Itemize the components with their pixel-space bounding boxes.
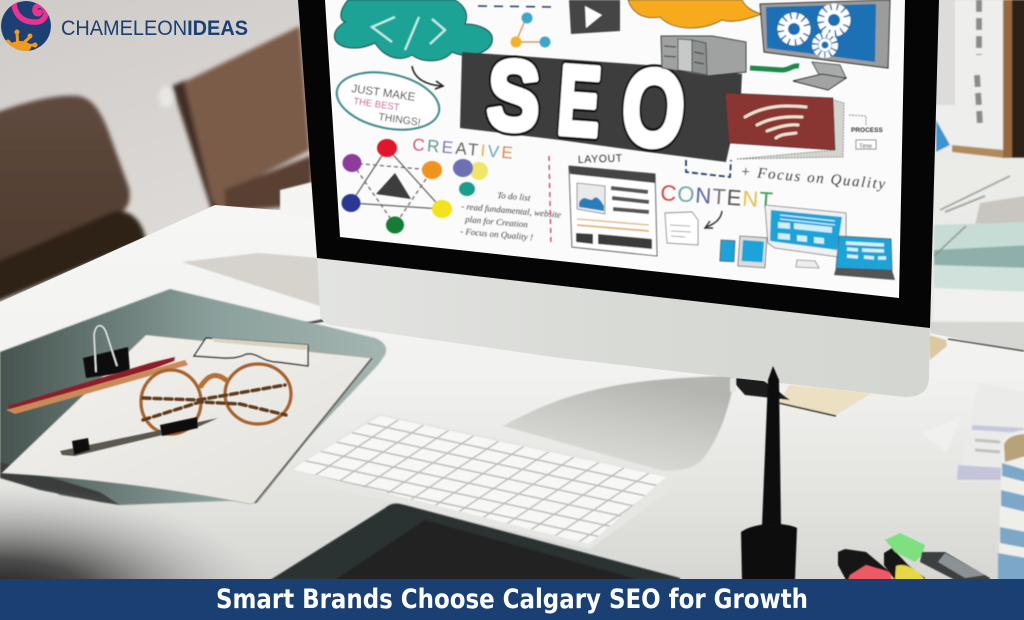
desk pen stem	[762, 366, 781, 526]
notebook under monitor	[730, 335, 947, 416]
white box behind monitor	[280, 182, 316, 218]
monitor bezel	[298, 0, 939, 328]
diagram: colour triangle	[342, 139, 488, 234]
binder clip	[83, 326, 130, 378]
text block: to do list: plan for Creation	[464, 214, 529, 229]
right desk edge line	[948, 339, 1024, 351]
letters outline: O	[618, 45, 689, 170]
label: process: PROCESS	[851, 127, 883, 134]
callout: just make the best things: THE BEST	[353, 96, 400, 113]
desk surface	[0, 205, 1024, 580]
background: left chair	[0, 96, 146, 304]
clipboard glasses case	[194, 338, 308, 366]
glasses	[141, 364, 291, 434]
text block: to do list: - Focus on Quality !	[460, 226, 533, 242]
callout: just make the best things: JUST MAKE	[351, 83, 416, 104]
screen artwork	[332, 0, 895, 280]
white wall panel	[930, 0, 1005, 150]
letters outline: E	[555, 44, 604, 157]
striped mug	[998, 430, 1024, 580]
dashed bracket	[686, 160, 731, 177]
text: focus on quality: + Focus on Quality	[740, 164, 887, 193]
inner tablet surface	[335, 520, 640, 580]
chair back	[184, 26, 310, 214]
monitor chin	[317, 255, 930, 397]
laptop device	[834, 236, 895, 280]
icon: play video	[569, 0, 620, 34]
red marker	[838, 549, 892, 580]
card: red wifi	[725, 93, 844, 159]
icon: desktop gears	[760, 0, 890, 90]
monitor stand	[503, 376, 735, 470]
wooden pencil	[6, 360, 188, 414]
folder	[0, 289, 386, 505]
logo wordmark: CHAMELEONIDEAS	[61, 17, 248, 40]
label: layout: LAYOUT	[578, 152, 623, 166]
notebook paper	[2, 335, 372, 504]
text block: to do list	[460, 190, 561, 242]
letters outline	[485, 39, 689, 170]
devices: responsive screens	[720, 205, 895, 280]
dark tablet	[270, 503, 680, 580]
blue object	[936, 120, 950, 152]
banner title: Smart Brands Choose Calgary SEO for Growth	[216, 584, 808, 615]
arrow: cloud to SEO	[412, 66, 443, 89]
chair base	[224, 155, 312, 212]
text block: to do list: - read fundamental, website	[461, 201, 561, 220]
red pencil	[8, 357, 175, 410]
letters fill	[485, 39, 689, 170]
label: process	[849, 115, 883, 150]
wooden frame	[952, 145, 1004, 158]
yellow marker	[884, 548, 925, 580]
monitor	[298, 0, 939, 397]
chair lower cushion	[0, 211, 146, 304]
tablet device	[738, 236, 767, 268]
network icon	[510, 12, 550, 48]
brand logo	[1, 1, 248, 53]
wireframe: layout window	[569, 166, 657, 256]
glasses lenses	[141, 364, 291, 434]
green marker	[885, 533, 925, 562]
background: right chair	[159, 26, 312, 218]
background: right shelf and blurred objects	[930, 0, 1024, 352]
callout: just make the best things	[332, 64, 444, 138]
dashed pink divider	[549, 156, 551, 245]
heading: content: CONTENT	[660, 180, 775, 213]
letters fill: E	[555, 44, 604, 157]
dashes	[478, 6, 552, 7]
label: process: Time	[859, 144, 873, 150]
desktop device	[765, 205, 846, 268]
speech bubble	[628, 0, 762, 28]
desk tray	[182, 253, 330, 325]
bottom left vignette	[0, 480, 270, 580]
chair knob	[159, 86, 173, 108]
icon: server	[661, 36, 746, 76]
arrow: content to document	[705, 211, 722, 228]
phone device	[720, 240, 735, 262]
monitor screen	[325, 0, 905, 298]
arrow: green	[750, 66, 799, 70]
pen holder	[741, 524, 797, 580]
letters fill: O	[618, 45, 689, 170]
letters outline: S	[485, 39, 543, 152]
papers on right	[921, 382, 1024, 482]
keyboard keys	[292, 416, 666, 544]
SEO banner	[460, 39, 742, 170]
keyboard base	[290, 413, 672, 549]
chair frame	[172, 80, 232, 218]
keyboard	[290, 413, 672, 549]
shelf text streaks	[977, 0, 980, 125]
heading: creative: CREATIVE	[412, 135, 516, 163]
blurred papers	[936, 158, 1024, 225]
logo badge	[1, 1, 51, 53]
background: wall	[0, 0, 1024, 330]
callout: just make the best things: THINGS!	[378, 111, 421, 129]
highlighters	[838, 533, 990, 580]
text block: to do list: To do list	[497, 190, 531, 203]
cloud: code	[334, 0, 492, 61]
glasses temples	[143, 385, 286, 420]
pen on notebook	[60, 417, 218, 456]
chair seat back	[0, 96, 130, 268]
icon: document	[665, 212, 698, 245]
letters fill: S	[485, 39, 543, 152]
footer banner	[0, 579, 1024, 620]
